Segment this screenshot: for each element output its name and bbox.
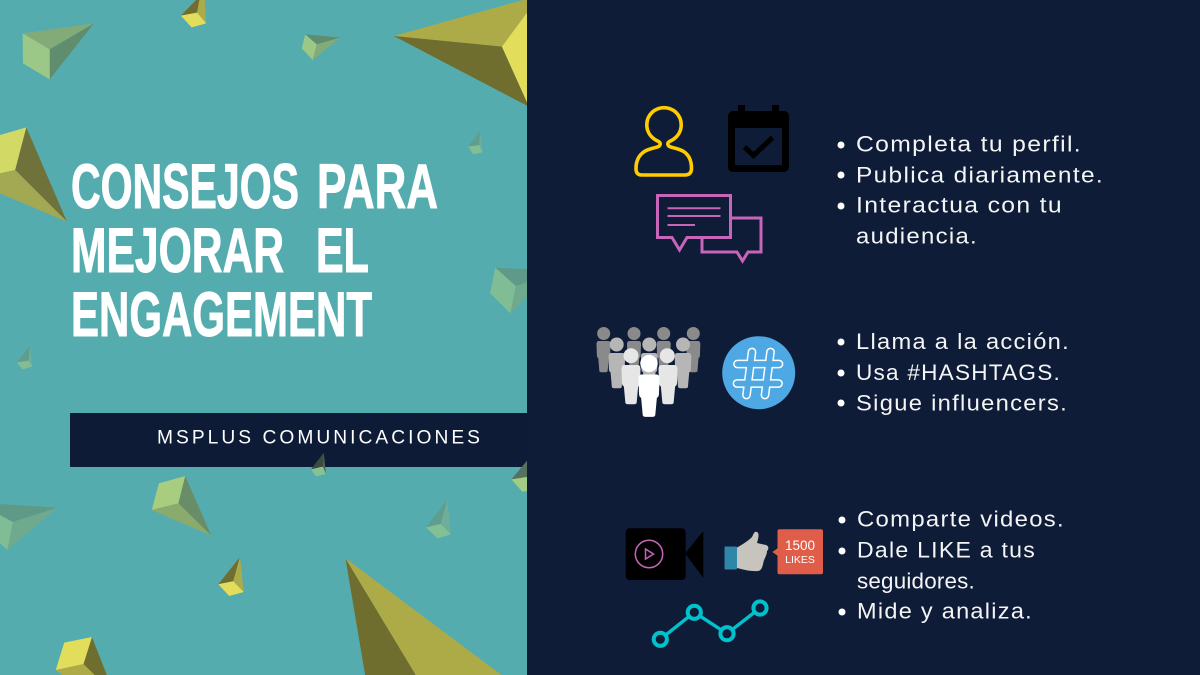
icon: line chart: [654, 601, 767, 646]
banner: msplus comunicaciones: MSPLUS COMUNICACIONES: [157, 428, 483, 448]
title: MEJORAR: [71, 216, 284, 286]
bullets: call to action tips: Llama a la acción.: [856, 329, 1070, 354]
title: [71, 152, 438, 350]
bullets: video and like tips: seguidores.: [857, 568, 975, 593]
title: EL: [316, 216, 369, 286]
bullets: profile tips: Completa tu perfil.: [856, 132, 1082, 157]
bullets: profile tips: [838, 132, 1104, 248]
badge: 1500 likes: [772, 529, 823, 574]
panel: teal left background: [0, 0, 527, 675]
icon: thumbs up: [724, 532, 768, 571]
title: CONSEJOS: [71, 152, 299, 222]
bullets: call to action tips: Usa #HASHTAGS.: [856, 360, 1061, 385]
banner: msplus comunicaciones: [70, 413, 527, 467]
icon: calendar with check: [728, 105, 789, 172]
title: ENGAGEMENT: [71, 280, 372, 350]
bullets: video and like tips: Dale LIKE a tus: [857, 538, 1036, 563]
badge: 1500 likes: LIKES: [785, 554, 815, 566]
icon: user profile: [636, 108, 692, 175]
bullets: video and like tips: Comparte videos.: [857, 507, 1065, 532]
bullets: call to action tips: Sigue influencers.: [856, 390, 1068, 416]
icon: chat bubbles: [658, 196, 761, 261]
bullets: profile tips: audiencia.: [856, 223, 978, 248]
icon: video camera: [626, 528, 703, 580]
badge: 1500 likes: 1500: [785, 538, 815, 553]
decoration: floating pyramids lower area: [0, 346, 529, 675]
icon: hashtag circle: [722, 336, 795, 409]
bullets: video and like tips: [838, 507, 1065, 623]
bullets: call to action tips: [838, 329, 1070, 416]
bullets: profile tips: Publica diariamente.: [856, 162, 1104, 187]
bullets: video and like tips: Mide y analiza.: [857, 598, 1033, 623]
icon: crowd of people: [596, 327, 700, 417]
decoration: floating pyramids upper area: [0, 0, 529, 313]
title: PARA: [317, 152, 438, 222]
panel: dark right background: [527, 0, 1200, 675]
bullets: profile tips: Interactua con tu: [856, 193, 1063, 218]
